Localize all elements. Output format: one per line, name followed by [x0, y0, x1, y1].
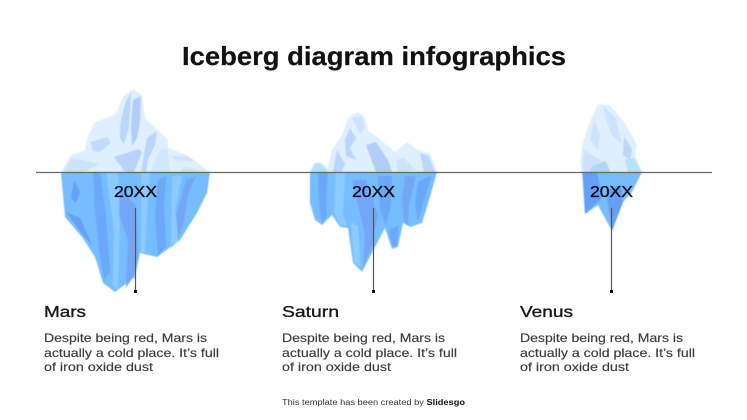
description: Venus: actually a cold place. It’s full: [520, 346, 695, 360]
description: Mars: [44, 331, 219, 374]
heading: Saturn: Saturn: [282, 304, 339, 321]
Venus above-water ice: [580, 104, 642, 172]
Saturn above-water ice: [310, 112, 437, 172]
title: Iceberg diagram infographics: [182, 41, 566, 71]
description: Mars: of iron oxide dust: [44, 360, 154, 374]
description: Venus: of iron oxide dust: [520, 360, 630, 374]
description: Saturn: [282, 331, 457, 374]
pointer: Venus: [610, 208, 613, 293]
pointer: Saturn: [372, 208, 375, 293]
iceberg: Venus: [580, 104, 642, 231]
Mars underwater ice: [61, 172, 210, 292]
waterline: [36, 172, 712, 174]
description: Venus: Despite being red, Mars is: [520, 331, 683, 345]
year label: Saturn: 20XX: [352, 184, 395, 201]
heading: Mars: Mars: [44, 304, 86, 321]
Mars above-water ice: [61, 89, 210, 172]
Saturn underwater ice: [310, 172, 437, 272]
year label: Mars: 20XX: [114, 184, 157, 201]
iceberg: Mars: [61, 89, 210, 292]
description: Mars: actually a cold place. It’s full: [44, 346, 219, 360]
heading: Venus: Venus: [520, 304, 573, 321]
description: Saturn: of iron oxide dust: [282, 360, 392, 374]
text block: Venus: [520, 304, 695, 374]
description: Saturn: actually a cold place. It’s full: [282, 346, 457, 360]
pointer: Mars: [134, 208, 137, 293]
Venus underwater ice: [582, 172, 642, 231]
year label: Venus: 20XX: [590, 184, 633, 201]
description: Mars: Despite being red, Mars is: [44, 331, 207, 345]
footer credit: This template has been created by Slidesgo: [282, 398, 465, 407]
iceberg: Saturn: [310, 112, 437, 272]
description: Venus: [520, 331, 695, 374]
description: Saturn: Despite being red, Mars is: [282, 331, 445, 345]
text block: Saturn: [282, 304, 457, 374]
text block: Mars: [44, 304, 219, 374]
